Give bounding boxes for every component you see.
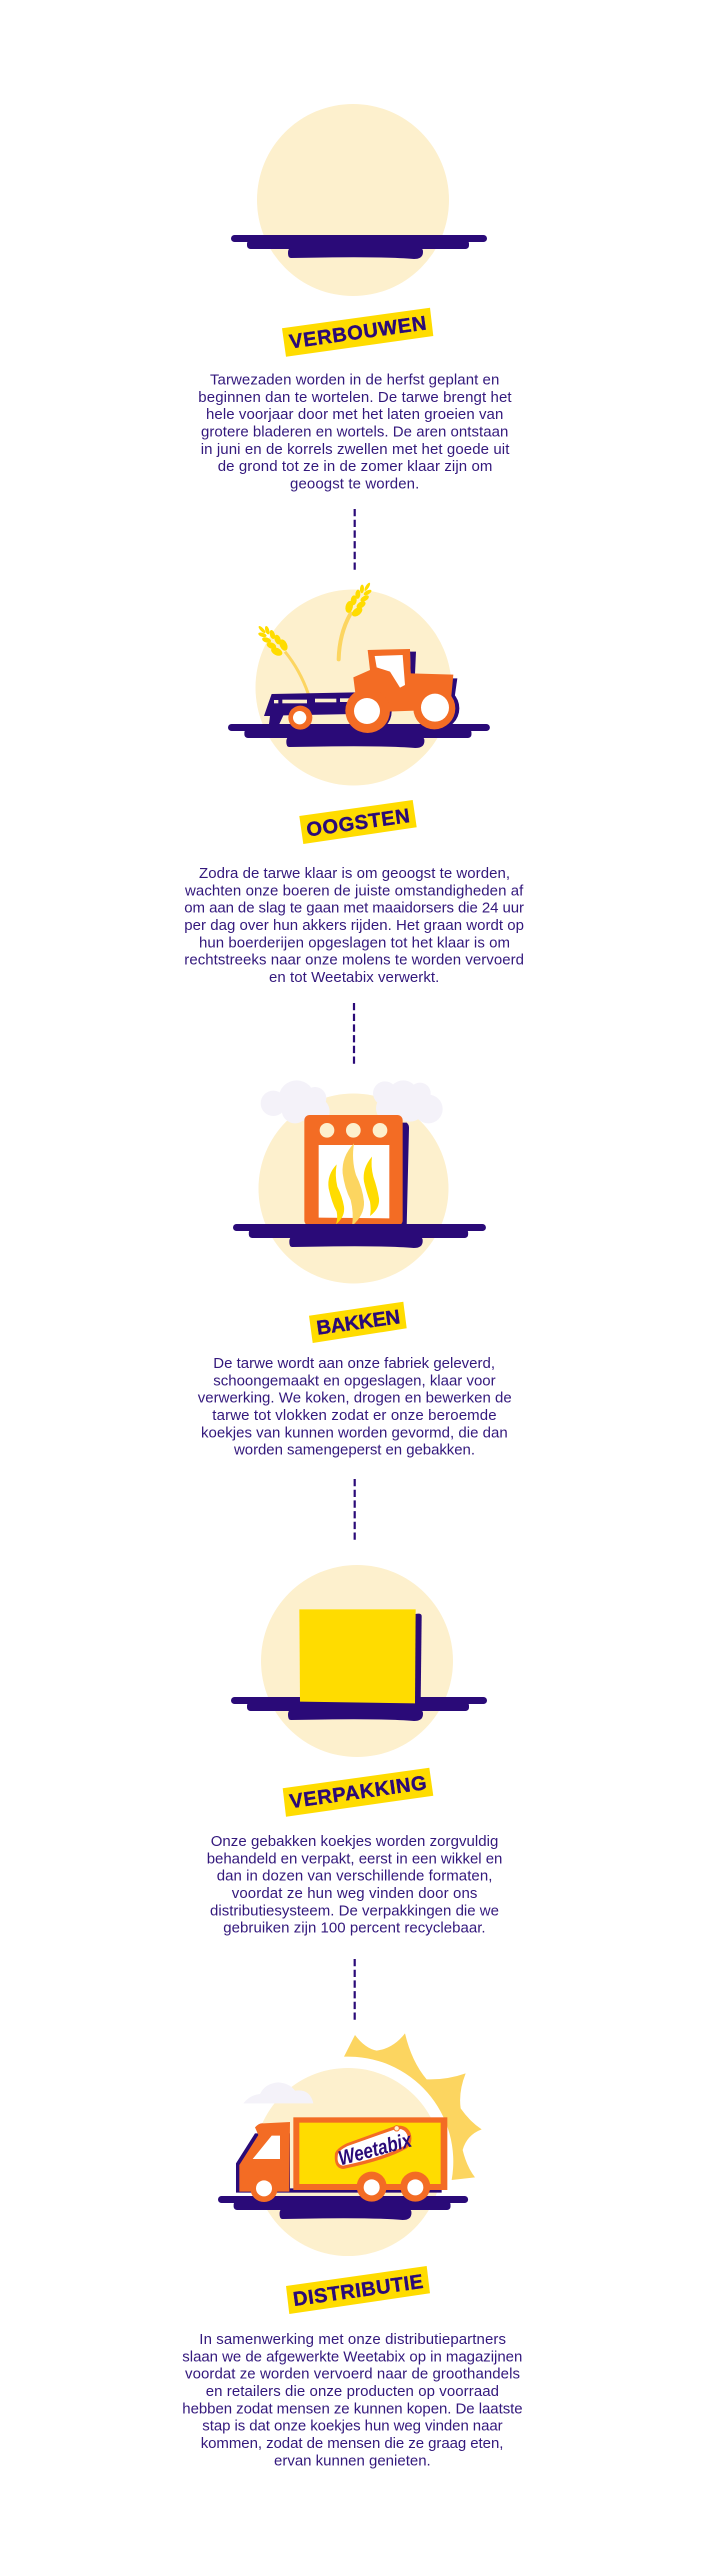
text block: bakken: schoongemaakt en opgeslagen, klaar voor bbox=[213, 1372, 496, 1389]
text block: oogsten bbox=[184, 865, 524, 986]
icon: truck scene bbox=[236, 2033, 482, 2202]
arrow: dashed connector 2 bbox=[353, 1003, 355, 1064]
icon: left flame bbox=[328, 1164, 344, 1224]
text block: oogsten: hun boerderijen opgeslagen tot het klaar is om bbox=[199, 934, 510, 951]
label: BAKKEN: BAKKEN bbox=[315, 1306, 402, 1340]
arrow: dashed connector 4 bbox=[354, 1959, 356, 2020]
text block: bakken bbox=[198, 1355, 512, 1459]
text block: verbouwen: beginnen dan te wortelen. De tarwe brengt het bbox=[198, 389, 512, 406]
icon: left wheat bbox=[251, 619, 308, 694]
icon: weetabix logo: Weetabix bbox=[336, 2128, 415, 2170]
icon: package box bbox=[299, 1609, 422, 1703]
text block: oogsten: per dag over hun akkers rijden. Het graan wordt op bbox=[184, 917, 524, 934]
icon: ground strokes bbox=[218, 2196, 468, 2220]
text block: distributie: hebben zodat mensen ze kunnen kopen. De laatste bbox=[182, 2400, 523, 2417]
panel: oogsten bbox=[184, 577, 524, 986]
text block: verpakking bbox=[207, 1833, 502, 1937]
icon: tractor with trailer and wheat bbox=[251, 577, 459, 733]
panel: distributie bbox=[182, 2033, 523, 2469]
text block: bakken: worden samengeperst en gebakken. bbox=[233, 1442, 475, 1459]
icon: sun circle background bbox=[257, 104, 449, 296]
icon: ground strokes bbox=[231, 1697, 487, 1721]
text block: verbouwen: in juni en de korrels zwellen met het goede uit bbox=[201, 441, 510, 458]
text block: bakken: koekjes van kunnen worden gevormd, die dan bbox=[201, 1424, 508, 1441]
icon: tractor bbox=[345, 649, 459, 733]
text block: distributie: slaan we de afgewerkte Weetabix op in magazijnen bbox=[182, 2348, 522, 2365]
text block: distributie: ervan kunnen genieten. bbox=[274, 2452, 431, 2469]
text block: oogsten: en tot Weetabix verwerkt. bbox=[269, 969, 439, 986]
text block: oogsten: om aan de slag te gaan met maaidorsers die 24 uur bbox=[184, 900, 524, 917]
panel: bakken bbox=[198, 1080, 512, 1459]
text block: distributie: voordat ze worden vervoerd naar de groothandels bbox=[185, 2366, 520, 2383]
icon: oven with clouds and flames bbox=[261, 1080, 443, 1227]
text block: oogsten: Zodra de tarwe klaar is om geoogst te worden, bbox=[199, 865, 510, 882]
icon: left cloud bbox=[261, 1080, 330, 1126]
label: OOGSTEN: OOGSTEN bbox=[305, 805, 411, 841]
text block: distributie: en retailers die onze producten op voorraad bbox=[206, 2383, 499, 2400]
text block: oogsten: wachten onze boeren de juiste omstandigheden af bbox=[184, 882, 524, 899]
icon: sun circle background bbox=[261, 1565, 453, 1757]
icon: ground strokes bbox=[228, 724, 490, 748]
text block: verpakking: voordat ze hun weg vinden door ons bbox=[232, 1885, 477, 1902]
arrow: dashed connector 1 bbox=[354, 509, 356, 570]
text block: verpakking: gebruiken zijn 100 percent recyclebaar. bbox=[223, 1920, 486, 1937]
label: VERPAKKING: VERPAKKING bbox=[288, 1772, 428, 1813]
text block: verbouwen bbox=[198, 372, 512, 492]
icon: oven bbox=[304, 1115, 409, 1227]
icon: sun circle background bbox=[254, 2068, 442, 2256]
icon: sun circle background bbox=[258, 1094, 448, 1284]
text block: verbouwen: de grond tot ze in de zomer klaar zijn om bbox=[218, 458, 492, 475]
label: VERBOUWEN: VERBOUWEN bbox=[288, 312, 428, 353]
text block: verbouwen: hele voorjaar door met het laten groeien van bbox=[206, 406, 503, 423]
icon: truck bbox=[236, 2117, 447, 2202]
icon: trailer bbox=[264, 692, 355, 730]
text block: bakken: verwerking. We koken, drogen en bewerken de bbox=[198, 1390, 512, 1407]
text block: verbouwen: geoogst te worden. bbox=[290, 476, 419, 492]
icon: sun circle background bbox=[256, 590, 452, 786]
text block: bakken: De tarwe wordt aan onze fabriek geleverd, bbox=[213, 1355, 495, 1372]
icon: centre flame bbox=[343, 1143, 364, 1226]
text block: distributie: kommen, zodat de mensen die ze graag eten, bbox=[201, 2435, 503, 2452]
text block: verpakking: behandeld en verpakt, eerst in een wikkel en bbox=[207, 1850, 502, 1867]
arrow: dashed connector 3 bbox=[354, 1479, 356, 1540]
label: DISTRIBUTIE: DISTRIBUTIE bbox=[292, 2271, 425, 2311]
icon: wheels bbox=[250, 2172, 430, 2202]
text block: verpakking: distributiesysteem. De verpakkingen die we bbox=[210, 1902, 499, 1919]
icon: ground strokes bbox=[231, 235, 487, 259]
text block: distributie bbox=[182, 2331, 523, 2469]
icon: cloud bbox=[243, 2082, 313, 2103]
text block: distributie: stap is dat onze koekjes hun weg vinden naar bbox=[202, 2418, 503, 2435]
text block: verpakking: Onze gebakken koekjes worden zorgvuldig bbox=[211, 1833, 498, 1850]
text block: bakken: tarwe tot vlokken zodat er onze beroemde bbox=[212, 1407, 497, 1424]
text block: verpakking: dan in dozen van verschillende formaten, bbox=[217, 1868, 492, 1885]
text block: distributie: In samenwerking met onze distributiepartners bbox=[199, 2331, 506, 2348]
icon: right cloud bbox=[373, 1080, 443, 1123]
icon: ground strokes bbox=[233, 1224, 486, 1248]
icon: right wheat bbox=[339, 577, 378, 659]
text block: verbouwen: Tarwezaden worden in de herfst geplant en bbox=[210, 372, 499, 388]
icon: right flame bbox=[364, 1157, 379, 1216]
text block: oogsten: rechtstreeks naar onze molens te worden vervoerd bbox=[184, 952, 524, 969]
icon: sun rays bbox=[344, 2033, 482, 2180]
panel: verbouwen bbox=[198, 104, 512, 492]
text block: verbouwen: grotere bladeren en wortels. De aren ontstaan bbox=[201, 424, 508, 440]
panel: verpakking bbox=[207, 1565, 502, 1937]
